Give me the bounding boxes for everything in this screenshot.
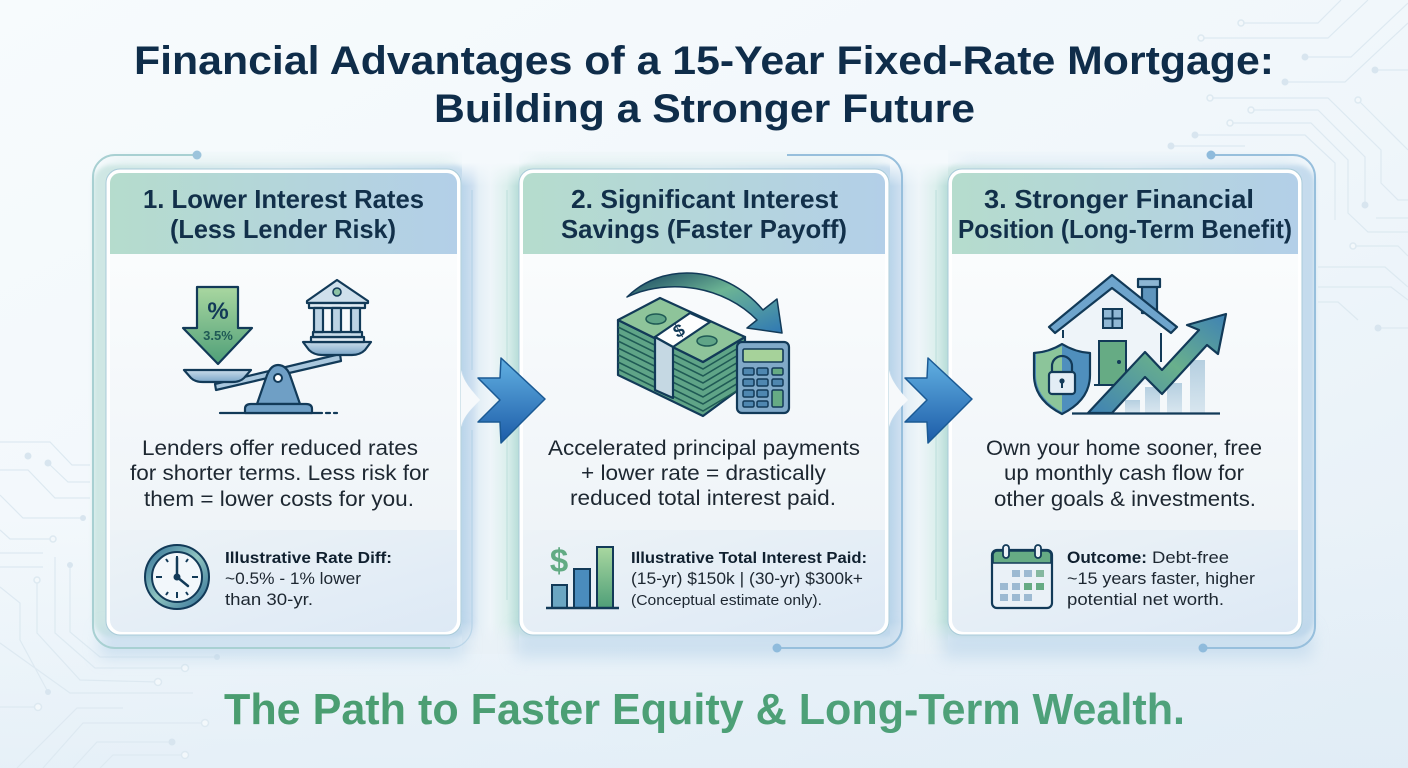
icon: scale with rate arrow and bank [183,280,371,413]
heading [523,173,885,254]
text block: other goals & investments. [994,488,1256,511]
icon: money stack, curved arrow and calculator: $ [670,320,688,342]
title [134,39,1274,131]
heading: (Less Lender Risk) [170,214,396,244]
title: Building a Stronger Future [434,87,975,131]
text block: for shorter terms. Less risk for [130,462,429,485]
card body [106,169,461,635]
card body [948,169,1302,635]
frame glow: card 3 [939,165,1315,637]
icon: money stack, curved arrow and calculator [618,273,789,416]
callout: rate difference: ~0.5% - 1% lower [225,569,361,588]
card body [519,169,889,635]
arrow: card 1 to card 2 [478,358,545,443]
callout: total interest paid: (Conceptual estimate only). [631,592,822,609]
callout: outcome: ~15 years faster, higher [1067,569,1255,588]
icon: clock [145,545,209,609]
heading: 3. Stronger Financial [984,184,1254,214]
heading [110,173,457,254]
callout: total interest paid: (15-yr) $150k | (30-yr) $300k+ [631,569,863,588]
icon: scale with rate arrow and bank: % [207,298,229,325]
frame glow: card 2 [510,165,902,637]
text block: Lenders offer reduced rates [142,437,418,460]
callout: rate difference: Illustrative Rate Diff: [225,550,392,567]
text block [986,437,1262,511]
heading: Savings (Faster Payoff) [561,214,847,244]
title: Financial Advantages of a 15-Year Fixed-Rate Mortgage: [134,39,1274,83]
connector band between cards 1 and 2 [462,150,519,654]
heading [952,173,1298,254]
text block: reduced total interest paid. [570,487,836,510]
text block: Accelerated principal payments [548,437,860,460]
heading: Position (Long-Term Benefit) [958,214,1292,244]
icon: bar chart with dollar: $ [550,542,568,579]
text block: Own your home sooner, free [986,437,1262,460]
panel: lower interest rates [106,169,461,635]
text block: them = lower costs for you. [144,488,414,511]
frame glow: card 1 [93,165,472,637]
frame outlines [93,150,1315,652]
circuit pattern: top right [1168,0,1408,332]
connector band between cards 2 and 3 [890,150,948,654]
panel: significant interest savings [519,169,889,635]
notch: card 2 edge [889,370,908,427]
text block [130,437,429,511]
icon: bar chart with dollar [546,542,619,608]
text block: up monthly cash flow for [1004,462,1244,485]
notch: card 1 edge [461,370,480,427]
circuit pattern: bottom left [0,442,220,768]
panel: stronger financial position [948,169,1302,635]
callout: rate difference: than 30-yr. [225,590,313,609]
card shadows [100,628,1312,658]
callout: rate difference [225,550,392,609]
callout: outcome: Outcome: [1067,548,1147,567]
heading: 1. Lower Interest Rates [143,184,424,214]
icon: calendar [992,545,1052,608]
arrow: card 2 to card 3 [905,358,972,443]
text block: + lower rate = drastically [581,462,827,485]
heading: 2. Significant Interest [571,184,838,214]
callout: outcome: potential net worth. [1067,590,1224,609]
icon: house, shield and rising arrow [1034,275,1226,414]
closing statement: The Path to Faster Equity & Long-Term Wealth. [224,685,1185,734]
soft glow above cards [110,160,1295,174]
icon: scale with rate arrow and bank: 3.5% [203,328,233,343]
text block [548,437,860,510]
callout: total interest paid [631,550,867,609]
callout: outcome [1067,548,1255,609]
callout: outcome: Debt-free [1152,548,1229,567]
callout: total interest paid: Illustrative Total Interest Paid: [631,550,867,567]
